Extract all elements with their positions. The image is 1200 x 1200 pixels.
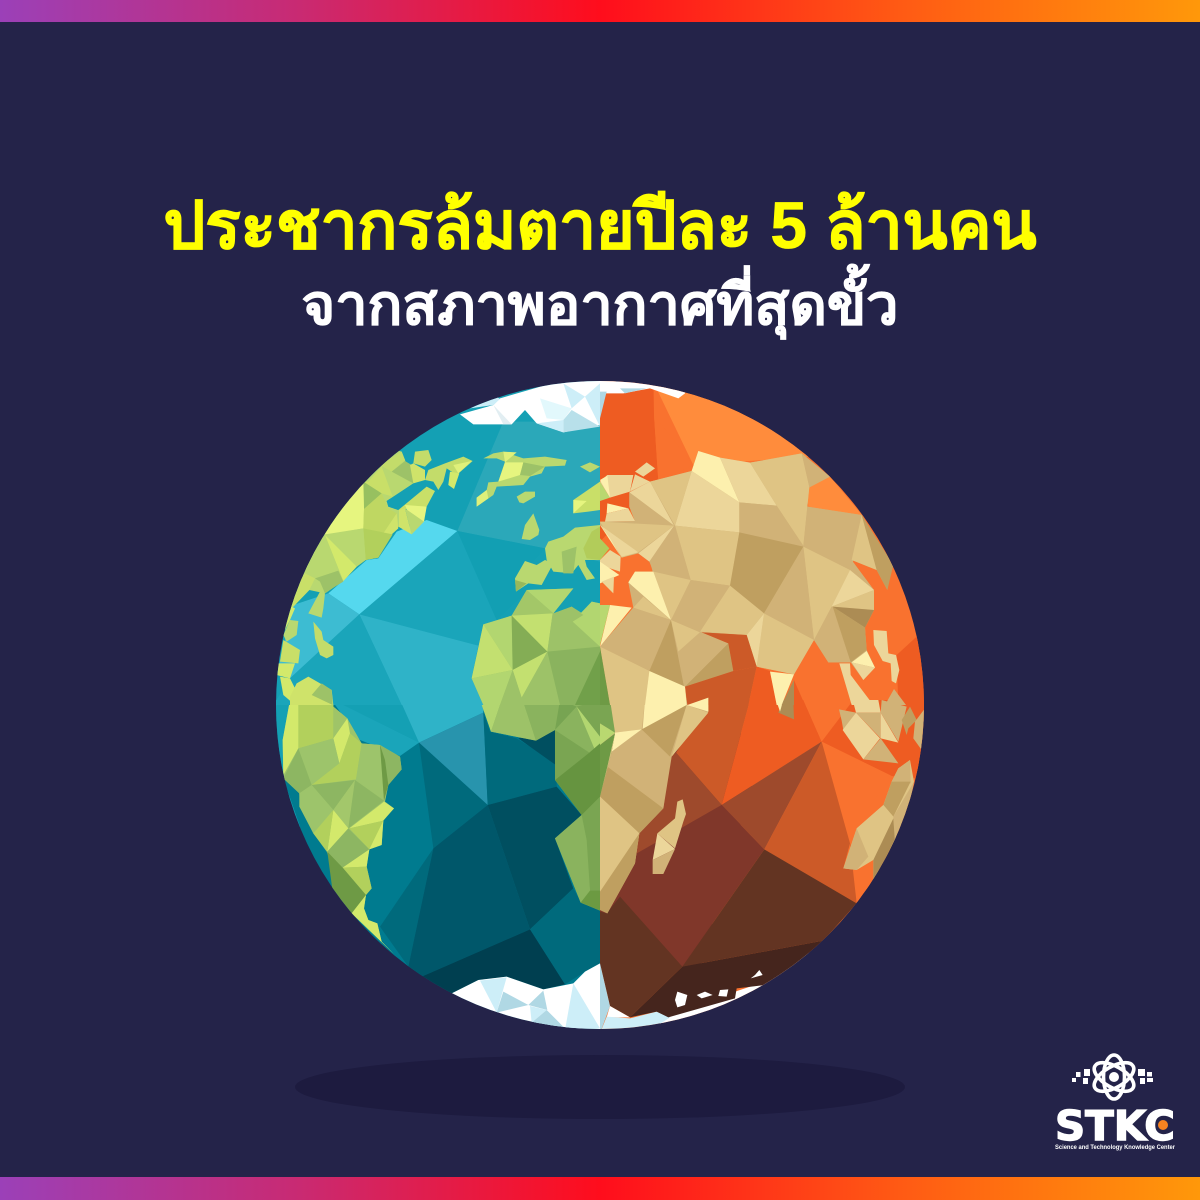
madagascar [653, 799, 686, 874]
upper right: asia and europe [600, 375, 933, 705]
india tip [776, 700, 794, 719]
europe fragments [600, 462, 655, 705]
lower right: indian ocean, africa east, australia [600, 700, 933, 1037]
africa west, lower [480, 700, 600, 911]
right half of globe [600, 375, 933, 1037]
low-poly globe [270, 375, 933, 1037]
south america [283, 700, 402, 954]
ice islets [675, 970, 763, 1007]
left half upper: ocean and land [270, 375, 600, 705]
bottom gradient bar [0, 1177, 1200, 1200]
stkc logo [1055, 1055, 1175, 1151]
europe west [515, 525, 600, 592]
australia [843, 760, 914, 880]
africa west, upper [472, 588, 600, 705]
greenland and north atlantic islands [477, 452, 600, 540]
title: ประชากรล้มตายปีละ 5 ล้านคน [164, 188, 1036, 262]
arctic ice edge [600, 381, 686, 418]
eurasia [600, 451, 893, 705]
south polar ice [452, 963, 600, 1035]
left half lower: ocean and land [270, 700, 600, 1035]
logo tagline: Science and Technology Knowledge Center [1055, 1144, 1175, 1151]
north america [270, 442, 473, 705]
north polar ice [460, 378, 600, 432]
logo orange dot [1158, 1120, 1168, 1130]
left half of globe [270, 375, 600, 1035]
logo icon: atom [1090, 1055, 1138, 1099]
top gradient bar [0, 0, 1200, 22]
logo wordmark: STKC [1055, 1102, 1175, 1150]
logo pixels [1072, 1069, 1153, 1084]
globe shadow [295, 1055, 905, 1119]
dark southern sea [630, 941, 840, 1017]
antarctic ice edge [600, 952, 809, 1029]
subtitle: จากสภาพอากาศที่สุดขั้ว [302, 264, 898, 340]
southeast asia [839, 700, 925, 763]
japan and pacific islands [839, 630, 906, 705]
africa east [600, 700, 708, 913]
